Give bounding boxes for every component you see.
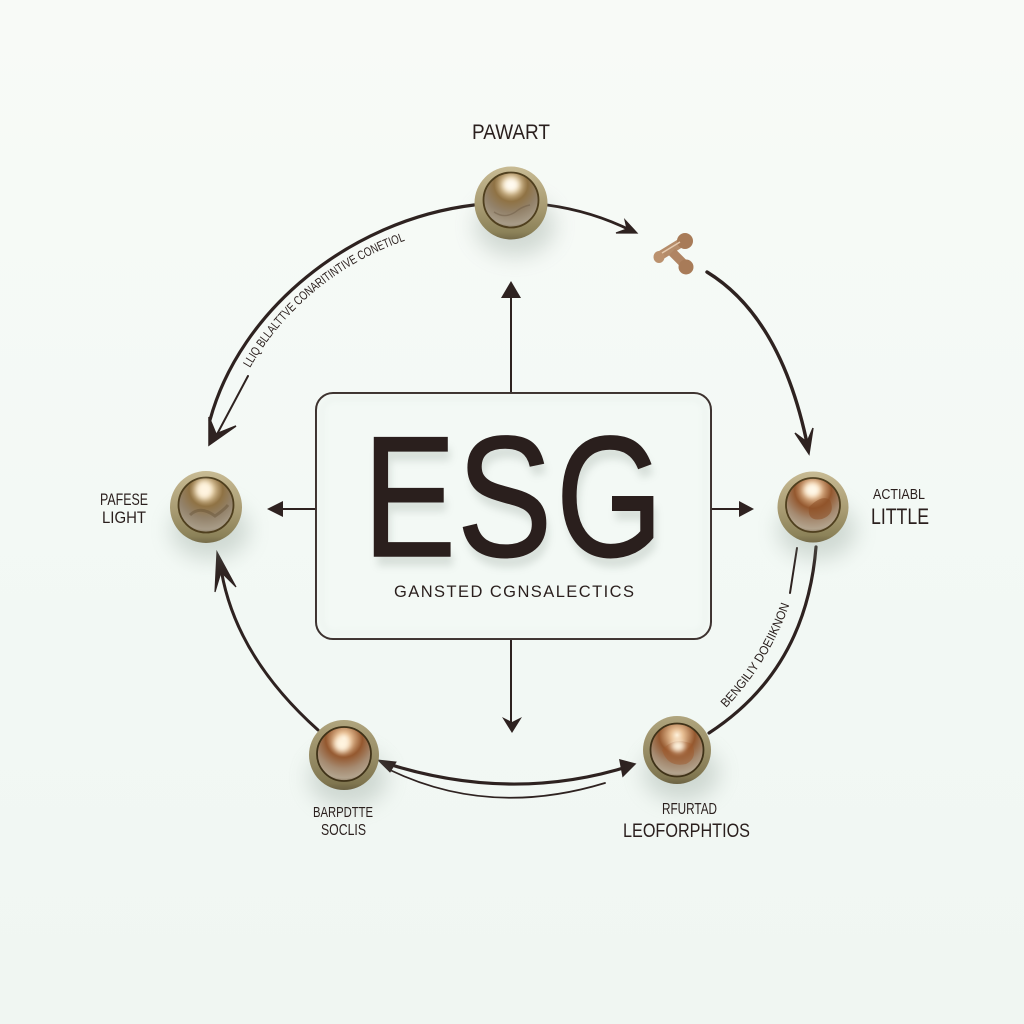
label: bottom left node: SOCLIS (321, 822, 366, 839)
arrow: right (711, 501, 754, 517)
panel: centre ESG card (316, 393, 711, 639)
label: left node: PAFESE (100, 490, 148, 509)
arrow: top node to bolt (547, 205, 637, 233)
label: bottom right node: RFURTAD (662, 801, 717, 818)
arrow: up (501, 281, 521, 393)
label: bottom right node: LEOFORPHTIOS (623, 821, 750, 842)
arrow: bolt to right node (707, 272, 813, 454)
node: bottom right (643, 716, 719, 801)
centre arrows (267, 281, 754, 733)
title: ESG: E (363, 401, 456, 593)
arrow: down (502, 640, 522, 733)
node: left (170, 471, 249, 559)
label: bottom right node (623, 801, 750, 842)
node: top (474, 166, 555, 256)
label: left node: LIGHT (102, 508, 146, 527)
curved label: lower right arc: BENGILIY DOEIIKNON (720, 602, 789, 708)
arrow: top node to left node (209, 205, 474, 445)
arrow: bottom left node to left node (215, 552, 318, 730)
icon: copper bolts (654, 233, 694, 274)
node: right (778, 472, 856, 559)
arrow: bottom pair (378, 760, 635, 798)
ESG shadow (366, 411, 666, 604)
title: ESG (363, 401, 663, 594)
label: bottom left node: BARPDTTE (313, 804, 373, 821)
arrow: right node to bottom right node (709, 547, 816, 733)
label: left node (100, 490, 148, 527)
curved label: upper left arc: LLIQ BLLALTTVE CONARITINTIVE CONETIOL (243, 234, 405, 368)
label: bottom left node (313, 804, 373, 839)
ESG shadow: G (559, 411, 666, 604)
title: ESG: G (556, 401, 663, 594)
ESG shadow: S (460, 411, 555, 603)
label: right node: LITTLE (871, 504, 929, 529)
arrow: left (267, 501, 316, 517)
title: ESG: S (457, 401, 552, 593)
label: top node: PAWART (472, 121, 550, 144)
ESG shadow: E (366, 411, 459, 603)
node: bottom left (309, 720, 387, 807)
subtitle: GANSTED CGNSALECTICS (394, 583, 634, 601)
label: right node (871, 486, 929, 529)
label: right node: ACTIABL (873, 486, 925, 503)
cycle ring of arrows (209, 205, 816, 798)
